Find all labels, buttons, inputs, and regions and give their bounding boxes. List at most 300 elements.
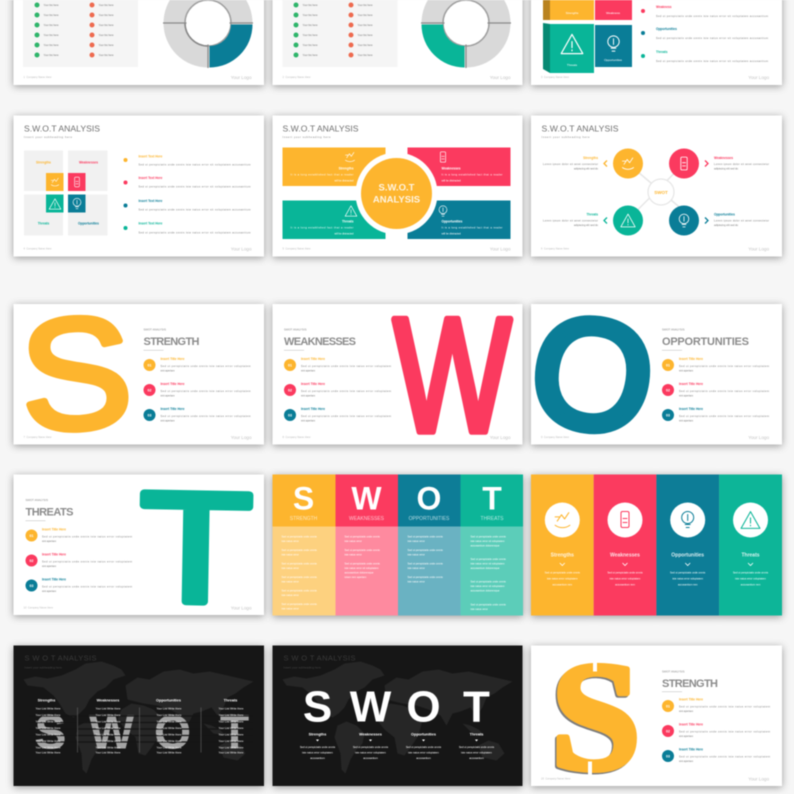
- lists: Your List Write Here: [218, 713, 244, 717]
- heading: [284, 654, 356, 670]
- heading: [144, 328, 200, 350]
- item list: Sed ut perspiciatis unde omnis iste natus error voluptatem: [160, 389, 250, 393]
- lists: Your List Write Here: [218, 739, 244, 743]
- item list: Insert Title Here: [160, 382, 185, 386]
- column: threats: iste natus error sit voluptatem: [470, 584, 505, 588]
- big letters: [303, 682, 490, 732]
- list: weakness, opportunities, threats: Sed ut perspiciatis unde omnis iste natus error sit voluptatem accusantium: [656, 36, 768, 40]
- striped letters: S: [34, 706, 67, 760]
- lists: Strengths: [38, 698, 55, 702]
- checklist panel: Your list here: [302, 53, 318, 57]
- item list: sint aperiam: [679, 368, 693, 372]
- column: weaknesses: [336, 474, 398, 616]
- slide: checklist with blue donut segment: [14, 0, 264, 85]
- item list: 02: [666, 729, 670, 733]
- lists: Your List Write Here: [156, 726, 182, 730]
- box: strengths: It is a long established fact that a reader: [290, 172, 354, 176]
- checklist panel: Your list here: [98, 53, 114, 57]
- footer: Your Logo: [231, 75, 252, 80]
- box: opportunities: It is a long established fact that a reader: [442, 226, 503, 230]
- column: threats: Sed ut perspiciatis unde omnis: [733, 570, 769, 574]
- item list: 02: [288, 388, 292, 392]
- slide: SWOT grid with list: [14, 116, 264, 256]
- big letters: O: [406, 682, 441, 732]
- captions: Sed ut perspiciatis unde omnis: [353, 745, 389, 749]
- box: weaknesses: [408, 148, 510, 186]
- column: weaknesses: Sed ut perspiciatis unde omnis: [344, 562, 381, 566]
- central circle: S.W.O.T: [379, 182, 415, 194]
- donut chart: [421, 0, 511, 68]
- checklist panel: Your list here: [44, 3, 59, 7]
- checklist panel: Your list here: [44, 23, 59, 27]
- big letter W: W: [394, 284, 511, 466]
- heading: WEAKNESSES: [284, 336, 356, 348]
- checklist panel: Your list here: [302, 33, 318, 37]
- column: weaknesses: accusantium doloremque: [344, 570, 374, 574]
- footer: 4 Company Name Here: [24, 246, 52, 250]
- heading: SWOT ANALYSIS: [26, 498, 48, 502]
- heading: [662, 328, 749, 350]
- heading: SWOT ANALYSIS: [662, 670, 685, 674]
- list: Insert Text Here: [138, 154, 163, 158]
- labels: adipiscing elit sed do: [574, 223, 599, 227]
- labels: adipiscing elit sed do: [574, 166, 599, 170]
- column: threats: [460, 474, 523, 616]
- item list: 02: [148, 388, 151, 392]
- lists: Your List Write Here: [156, 750, 182, 754]
- lists: Your List Write Here: [96, 713, 121, 717]
- item list: Insert Title Here: [301, 357, 325, 361]
- item list: sint aperiam: [160, 394, 175, 398]
- heading: Insert your subheading here: [24, 135, 72, 139]
- item list: Insert Title Here: [679, 748, 703, 752]
- column: weaknesses: iste natus error: [344, 539, 362, 543]
- column: strength: [272, 474, 336, 616]
- lists: Your List Write Here: [156, 746, 182, 750]
- column: strength: iste natus error: [282, 566, 299, 570]
- item list: [662, 357, 769, 422]
- labels: Lorem ipsum dolor sit amet consectetur: [543, 218, 598, 222]
- column: strength: STRENGTH: [290, 516, 318, 522]
- column: threats: accusantium rem: [741, 582, 760, 586]
- checklist panel: [23, 0, 138, 67]
- heading: [284, 328, 356, 350]
- item list: Sed ut perspiciatis unde omnis iste natus error voluptatem: [679, 754, 770, 758]
- footer: 5 Company Name Here: [282, 246, 311, 250]
- column: strengths: accusantium rem: [552, 582, 572, 586]
- item list: Insert Title Here: [679, 357, 703, 361]
- footer: Your Logo: [748, 75, 769, 80]
- column: strength: S: [293, 480, 314, 516]
- box: threats: [282, 200, 386, 239]
- column: weaknesses: totam rem aperiam: [344, 575, 366, 579]
- footer: [24, 75, 252, 80]
- checklist panel: Your list here: [358, 23, 373, 27]
- big letter O: O: [521, 280, 664, 468]
- big letters: W: [350, 682, 392, 732]
- checklist panel: Your list here: [358, 43, 373, 47]
- column: threats: THREATS: [481, 516, 504, 522]
- 3D cubes: Weakness: [606, 11, 620, 15]
- footer: 15 Company Name Here: [541, 776, 571, 780]
- heading: THREATS: [26, 506, 74, 518]
- lists: Your List Write Here: [218, 706, 244, 710]
- captions: accusantium: [469, 756, 484, 760]
- big letters: S: [303, 682, 332, 732]
- heading: S.W.O.T ANALYSIS: [542, 124, 619, 134]
- item list: Insert Title Here: [679, 722, 703, 726]
- column: strengths: [531, 474, 594, 616]
- item list: Insert Title Here: [679, 698, 703, 702]
- lists: Your List Write Here: [156, 720, 182, 724]
- box: strengths: Strengths: [339, 166, 354, 170]
- captions: iste natus error voluptatem: [461, 750, 492, 754]
- checklist panel: Your list here: [98, 13, 114, 17]
- footer: [541, 435, 769, 440]
- list: Insert Text Here: [138, 176, 163, 180]
- slide: threats: [14, 460, 264, 636]
- captions: Sed ut perspiciatis unde omnis: [459, 745, 495, 749]
- footer: [24, 606, 252, 610]
- captions: Threats: [470, 732, 483, 736]
- heading: S.W.O.T ANALYSIS: [24, 124, 100, 134]
- box: threats: Threats: [342, 220, 354, 224]
- list: weakness, opportunities, threats: Sed ut perspiciatis unde omnis iste natus error sit voluptatem accusantium: [656, 14, 768, 18]
- list: weakness, opportunities, threats: Weakness: [656, 5, 672, 9]
- footer: Your Logo: [231, 606, 252, 610]
- footer: 3 Company Name Here: [541, 75, 570, 79]
- list: Sed ut perspiciatis unde omnis iste natus error sit voluptatem accusantium: [138, 230, 250, 234]
- list: weakness, opportunities, threats: Opportunities: [656, 27, 677, 31]
- column: opportunities: iste natus error: [408, 566, 425, 570]
- footer: 7 Company Name Here: [24, 435, 52, 439]
- hub diagram: SWOT: [654, 190, 668, 195]
- labels: Lorem ipsum dolor sit amet consectetur: [714, 218, 769, 222]
- item list: sint aperiam: [42, 564, 56, 568]
- column: weaknesses: Sed ut perspiciatis unde omnis: [344, 548, 381, 552]
- box: opportunities: Opportunities: [442, 220, 463, 224]
- column: strength: Sed ut perspiciatis unde omnis: [282, 534, 318, 538]
- lists: Your List Write Here: [218, 732, 244, 736]
- item list: Insert Title Here: [42, 552, 66, 556]
- box: weaknesses: It is a long established fact that a reader: [442, 172, 503, 176]
- column: strength: Sed ut perspiciatis unde omnis: [282, 562, 318, 566]
- column: threats: iste natus error voluptatem: [735, 576, 766, 580]
- column: opportunities: Sed ut perspiciatis unde omnis: [408, 548, 444, 552]
- column: threats: Sed ut perspiciatis unde omnis: [470, 534, 507, 538]
- item list: Insert Title Here: [301, 382, 325, 386]
- column: threats: accusantium doloremque: [470, 588, 500, 592]
- checklist panel: Your list here: [98, 23, 114, 27]
- box: weaknesses: Weaknesses: [442, 166, 461, 170]
- column: opportunities: Sed ut perspiciatis unde omnis: [408, 562, 444, 566]
- heading: S W O T ANALYSIS: [284, 654, 356, 662]
- column: weaknesses: W: [351, 480, 382, 516]
- slide: dark SWOT lists: [14, 646, 264, 786]
- lists: Weaknesses: [97, 698, 119, 702]
- item list: [662, 698, 770, 763]
- column: weaknesses: accusantium rem: [615, 582, 635, 586]
- item list: Sed ut perspiciatis unde omnis iste natus error voluptatem: [679, 389, 769, 393]
- lists: Your List Write Here: [218, 720, 244, 724]
- column: strength: Sed ut perspiciatis unde omnis: [282, 602, 318, 606]
- striped letters: W: [89, 706, 135, 760]
- box: threats: will be distracted: [334, 232, 354, 236]
- lists: Your List Write Here: [96, 726, 121, 730]
- 3D cubes: Opportunities: [604, 58, 622, 62]
- item list: 01: [666, 704, 670, 708]
- checklist panel: Your list here: [302, 13, 318, 17]
- labels: Threats: [586, 212, 598, 216]
- slide: 3D cube matrix: [531, 0, 782, 85]
- list: Insert Text Here: [138, 222, 163, 226]
- item list: sint aperiam: [679, 734, 693, 738]
- captions: accusantium: [416, 756, 431, 760]
- item list: Sed ut perspiciatis unde omnis iste natus error voluptatem: [301, 414, 391, 418]
- lists: [36, 698, 244, 754]
- captions: Weaknesses: [359, 732, 382, 736]
- item list: 03: [666, 754, 670, 758]
- labels: [543, 156, 769, 227]
- column: opportunities: [656, 474, 719, 616]
- list: weakness, opportunities, threats: Threats: [656, 50, 668, 54]
- footer: Your Logo: [231, 246, 252, 252]
- captions: iste natus error voluptatem: [355, 750, 386, 754]
- grid: Opportunities: [78, 222, 99, 226]
- column: threats: [719, 474, 782, 616]
- captions: accusantium: [363, 756, 378, 760]
- slide: strength: [14, 283, 264, 465]
- checklist panel: Your list here: [44, 13, 59, 17]
- captions: [300, 732, 495, 760]
- labels: Lorem ipsum dolor sit amet consectetur: [543, 162, 598, 166]
- lists: Your List Write Here: [156, 732, 182, 736]
- heading: Insert your subheading here: [282, 135, 331, 139]
- list: Sed ut perspiciatis unde omnis iste natus error sit voluptatem accusantium: [138, 184, 250, 188]
- item list: sint aperiam: [42, 589, 56, 593]
- item list: Insert Title Here: [42, 528, 66, 532]
- footer: Your Logo: [490, 75, 511, 80]
- box: threats: It is a long established fact that a reader: [290, 226, 354, 230]
- captions: Sed ut perspiciatis unde omnis: [300, 745, 336, 749]
- world map: [282, 662, 512, 774]
- item list: Sed ut perspiciatis unde omnis iste natus error voluptatem: [42, 534, 132, 538]
- item list: Sed ut perspiciatis unde omnis iste natus error voluptatem: [679, 704, 770, 708]
- slide: checklist with green donut segment: [272, 0, 522, 85]
- column: threats: Threats: [741, 552, 760, 558]
- checklist panel: Your list here: [358, 53, 373, 57]
- lists: Opportunities: [156, 698, 181, 702]
- 3D cubes: [543, 0, 632, 73]
- column: opportunities: OPPORTUNITIES: [409, 516, 450, 522]
- box: opportunities: [408, 200, 510, 239]
- slide: opportunities: [521, 280, 782, 468]
- 3D cubes: Threats: [567, 63, 578, 67]
- column: opportunities: iste natus error: [408, 552, 425, 556]
- item list: [144, 357, 250, 422]
- labels: Opportunities: [714, 212, 735, 216]
- column: weaknesses: [594, 474, 656, 616]
- item list: Sed ut perspiciatis unde omnis iste natus error voluptatem: [679, 414, 769, 418]
- lists: Your List Write Here: [36, 726, 61, 730]
- lists: Your List Write Here: [96, 746, 121, 750]
- item list: 01: [288, 363, 292, 367]
- heading: [24, 654, 96, 670]
- footer: 1 Company Name Here: [24, 75, 52, 79]
- lists: Your List Write Here: [96, 720, 121, 724]
- item list: 01: [666, 363, 670, 367]
- striped letters: T: [220, 706, 249, 760]
- heading: [24, 124, 100, 139]
- heading: Insert your subheading here: [284, 666, 321, 670]
- footer: 8 Company Name Here: [282, 435, 311, 439]
- lists: Your List Write Here: [36, 750, 61, 754]
- lists: Your List Write Here: [96, 706, 121, 710]
- 3D cubes: Strengths: [566, 11, 579, 15]
- heading: Insert your subheading here: [542, 135, 590, 139]
- lists: Your List Write Here: [218, 726, 244, 730]
- heading: [662, 670, 718, 692]
- grid: [24, 150, 108, 236]
- captions: Opportunities: [411, 732, 436, 736]
- item list: Sed ut perspiciatis unde omnis iste natus error voluptatem: [679, 730, 770, 734]
- lists: Your List Write Here: [36, 720, 61, 724]
- item list: sint aperiam: [42, 539, 56, 543]
- column: threats: iste natus error sit voluptatem: [470, 562, 505, 566]
- box: strengths: will be distracted: [334, 178, 354, 182]
- labels: adipiscing elit sed do: [714, 223, 739, 227]
- checklist panel: Your list here: [358, 33, 373, 37]
- footer: [541, 75, 769, 80]
- labels: adipiscing elit sed do: [714, 166, 739, 170]
- item list: 02: [30, 559, 33, 563]
- big letter T: T: [138, 460, 254, 636]
- column: threats: Sed ut perspiciatis unde omnis: [470, 557, 507, 561]
- footer: [282, 435, 511, 440]
- lists: Your List Write Here: [96, 739, 121, 743]
- heading: S.W.O.T ANALYSIS: [282, 124, 359, 134]
- captions: iste natus error voluptatem: [408, 750, 439, 754]
- slide: dark SWOT letters: [272, 646, 522, 786]
- lists: Your List Write Here: [156, 713, 182, 717]
- captions: Strengths: [309, 732, 326, 736]
- column: strengths: Sed ut perspiciatis unde omnis: [545, 570, 581, 574]
- lists: Your List Write Here: [36, 739, 61, 743]
- big letter S: S: [16, 283, 136, 465]
- item list: Insert Title Here: [679, 382, 703, 386]
- slide: SWOT columns with icons: [531, 474, 782, 616]
- column: threats: Sed ut perspiciatis unde omnis: [470, 602, 507, 606]
- footer: Your Logo: [748, 246, 769, 252]
- big letters: T: [463, 682, 490, 732]
- column: opportunities: Sed ut perspiciatis unde omnis: [670, 570, 706, 574]
- item list: sint aperiam: [301, 368, 315, 372]
- striped letters: O: [154, 706, 191, 760]
- lists: Your List Write Here: [96, 750, 121, 754]
- footer: [282, 246, 511, 252]
- column: strength: Sed ut perspiciatis unde omnis: [282, 575, 318, 579]
- column: threats: accusantium doloremque: [470, 544, 500, 548]
- grid: Strengths: [36, 160, 51, 164]
- item list: sint aperiam: [301, 418, 315, 422]
- labels: Weaknesses: [714, 156, 733, 160]
- column: threats: T: [482, 480, 502, 516]
- checklist panel: Your list here: [44, 33, 59, 37]
- footer: [541, 246, 769, 252]
- item list: 03: [148, 413, 151, 417]
- donut chart: [163, 0, 253, 68]
- item list: Sed ut perspiciatis unde omnis iste natus error voluptatem: [301, 389, 391, 393]
- list: Insert Text Here: [138, 199, 163, 203]
- column: threats: Sed ut perspiciatis unde omnis: [470, 580, 507, 584]
- column: weaknesses: iste natus error: [344, 552, 362, 556]
- item list: sint aperiam: [679, 394, 693, 398]
- grid: Threats: [38, 222, 49, 226]
- lists: Your List Write Here: [156, 739, 182, 743]
- column: strength: Sed ut perspiciatis unde omnis: [282, 588, 318, 592]
- lists: Threats: [224, 698, 237, 702]
- column: strengths: iste natus error voluptatem: [547, 576, 578, 580]
- item list: sint aperiam: [301, 394, 315, 398]
- heading: S W O T ANALYSIS: [24, 654, 96, 662]
- list: Sed ut perspiciatis unde omnis iste natus error sit voluptatem accusantium: [138, 208, 250, 212]
- item list: Insert Title Here: [160, 357, 185, 361]
- checklist panel: Your list here: [302, 3, 318, 7]
- footer: Your Logo: [231, 435, 252, 440]
- footer: 6 Company Name Here: [541, 246, 570, 250]
- column: strengths: Strengths: [551, 552, 574, 558]
- lists: Your List Write Here: [218, 750, 244, 754]
- item list: 01: [148, 363, 151, 367]
- checklist panel: Your list here: [98, 33, 114, 37]
- world map: [24, 662, 254, 774]
- item list: sint aperiam: [160, 368, 175, 372]
- footer: [282, 75, 511, 80]
- striped letters: [28, 706, 254, 760]
- lists: Your List Write Here: [36, 713, 61, 717]
- box: strengths: [282, 148, 386, 186]
- item list: [284, 357, 391, 422]
- lists: Your List Write Here: [156, 706, 182, 710]
- item list: 02: [666, 388, 670, 392]
- list: Sed ut perspiciatis unde omnis iste natus error sit voluptatem accusantium: [138, 162, 250, 166]
- footer: [541, 776, 769, 782]
- footer: 2 Company Name Here: [282, 75, 311, 79]
- item list: Sed ut perspiciatis unde omnis iste natus error voluptatem: [160, 414, 250, 418]
- item list: Insert Title Here: [301, 407, 325, 411]
- column: opportunities: iste natus error voluptatem: [672, 576, 703, 580]
- column: opportunities: [398, 474, 460, 616]
- item list: sint aperiam: [160, 418, 175, 422]
- column: opportunities: Sed ut perspiciatis unde omnis: [408, 575, 444, 579]
- central circle: [356, 152, 438, 234]
- lists: Your List Write Here: [96, 732, 121, 736]
- column: opportunities: accusantium rem: [678, 582, 698, 586]
- footer: 10 Company Name Here: [24, 606, 53, 610]
- column: strength: iste natus error: [282, 593, 299, 597]
- footer: Your Logo: [490, 435, 511, 440]
- captions: accusantium: [310, 756, 325, 760]
- heading: SWOT ANALYSIS: [284, 328, 307, 332]
- checklist panel: Your list here: [98, 43, 114, 47]
- column: opportunities: Sed ut perspiciatis unde omnis: [408, 534, 444, 538]
- footer: 9 Company Name Here: [541, 435, 570, 439]
- heading: Insert your subheading here: [24, 666, 62, 670]
- footer: [24, 435, 252, 440]
- item list: Insert Title Here: [160, 407, 185, 411]
- box: opportunities: will be distracted: [442, 232, 461, 236]
- column: weaknesses: Sed ut perspiciatis unde omnis: [344, 534, 381, 538]
